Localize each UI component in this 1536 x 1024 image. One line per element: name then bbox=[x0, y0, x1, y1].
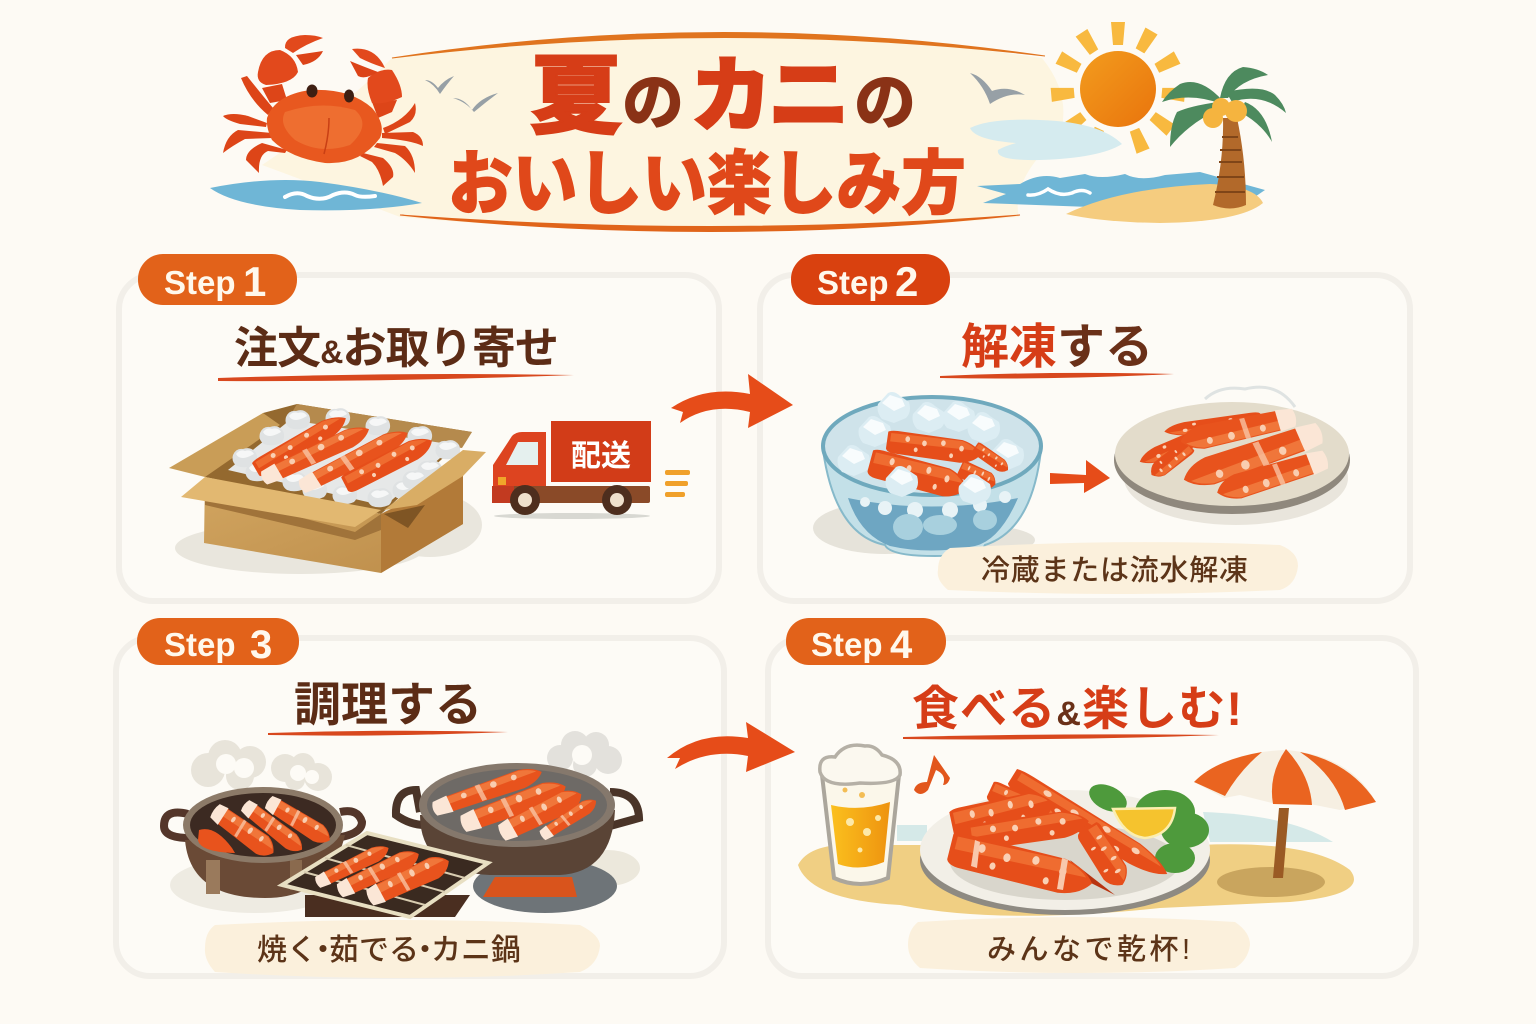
illustration: right pan on burner bbox=[396, 763, 640, 913]
illustration: ice bowl bbox=[813, 392, 1041, 556]
title: の bbox=[854, 69, 916, 138]
icon: beach island bbox=[1066, 184, 1263, 223]
arrow: step 3 to step 4 bbox=[667, 722, 795, 772]
icon: crab bbox=[223, 35, 423, 186]
badge: step 4 bbox=[786, 618, 946, 667]
icon: sea bbox=[977, 172, 1265, 207]
icon: seagulls bbox=[425, 73, 1025, 112]
badge: step 2: Step bbox=[817, 264, 889, 301]
title: カニ bbox=[690, 51, 850, 142]
illustration: left pot bbox=[164, 787, 362, 913]
illustration: delivery truck bbox=[492, 421, 651, 519]
illustration: grill bbox=[282, 833, 488, 917]
icon: cloud bbox=[970, 120, 1122, 160]
illustration: thawed crab plate bbox=[1114, 387, 1350, 525]
badge: step 3: 3 bbox=[250, 623, 272, 667]
heading: step 3: 調理する bbox=[294, 678, 482, 731]
caption: step 2 bbox=[938, 542, 1298, 594]
panel: step 3 bbox=[116, 638, 724, 976]
heading: step 2: 解凍する bbox=[961, 321, 1153, 374]
arrow: step 1 to step 2 bbox=[671, 374, 793, 428]
icon: steam right bbox=[547, 731, 622, 777]
illustration: beach bbox=[798, 812, 1354, 916]
icon: music note bbox=[914, 755, 950, 794]
badge: step 4: Step bbox=[811, 626, 883, 663]
panel: step 4 bbox=[768, 638, 1416, 976]
badge: step 1 bbox=[138, 254, 297, 305]
panel: step 1 bbox=[119, 275, 719, 601]
badge: step 3 bbox=[137, 618, 299, 667]
garnish: lemon bbox=[1113, 808, 1175, 838]
icon: palm tree bbox=[1162, 67, 1286, 208]
badge: step 3: Step bbox=[164, 626, 236, 663]
garnish: lettuce bbox=[1085, 779, 1209, 873]
title: の bbox=[622, 69, 684, 138]
caption: step 4 bbox=[908, 917, 1250, 973]
badge: step 2 bbox=[791, 254, 950, 305]
heading: step 4: 食べる&楽しむ! bbox=[912, 682, 1242, 735]
badge: step 4: 4 bbox=[890, 623, 913, 667]
heading: step 1: 注文&お取り寄せ bbox=[234, 324, 559, 373]
caption: step 4: みんなで乾杯! bbox=[987, 933, 1190, 966]
illustration: delivery truck: 配送 bbox=[571, 440, 631, 473]
caption: step 3 bbox=[205, 920, 600, 978]
title bbox=[448, 49, 966, 223]
icon: steam left bbox=[191, 740, 332, 791]
foam bbox=[228, 408, 460, 507]
illustration: beach umbrella bbox=[1194, 749, 1376, 878]
illustration: crab box bbox=[169, 404, 486, 574]
caption: step 3: 焼く・茹でる・カニ鍋 bbox=[257, 934, 521, 967]
title: おいしい楽しみ方 bbox=[448, 145, 966, 223]
icon: sun bbox=[1051, 22, 1185, 154]
badge: step 1: Step bbox=[164, 264, 236, 301]
arrow: thaw bbox=[1050, 460, 1110, 493]
badge: step 2: 2 bbox=[895, 258, 918, 305]
header banner bbox=[262, 32, 1063, 232]
illustration: crab plate bbox=[920, 767, 1210, 915]
icon: left water bbox=[210, 180, 422, 210]
panel: step 2 bbox=[760, 275, 1410, 601]
badge: step 1: 1 bbox=[243, 258, 266, 305]
title: 夏 bbox=[530, 49, 622, 145]
icon: speed lines bbox=[665, 470, 690, 497]
illustration: beer glass bbox=[820, 745, 900, 884]
caption: step 2: 冷蔵または流水解凍 bbox=[981, 554, 1248, 587]
